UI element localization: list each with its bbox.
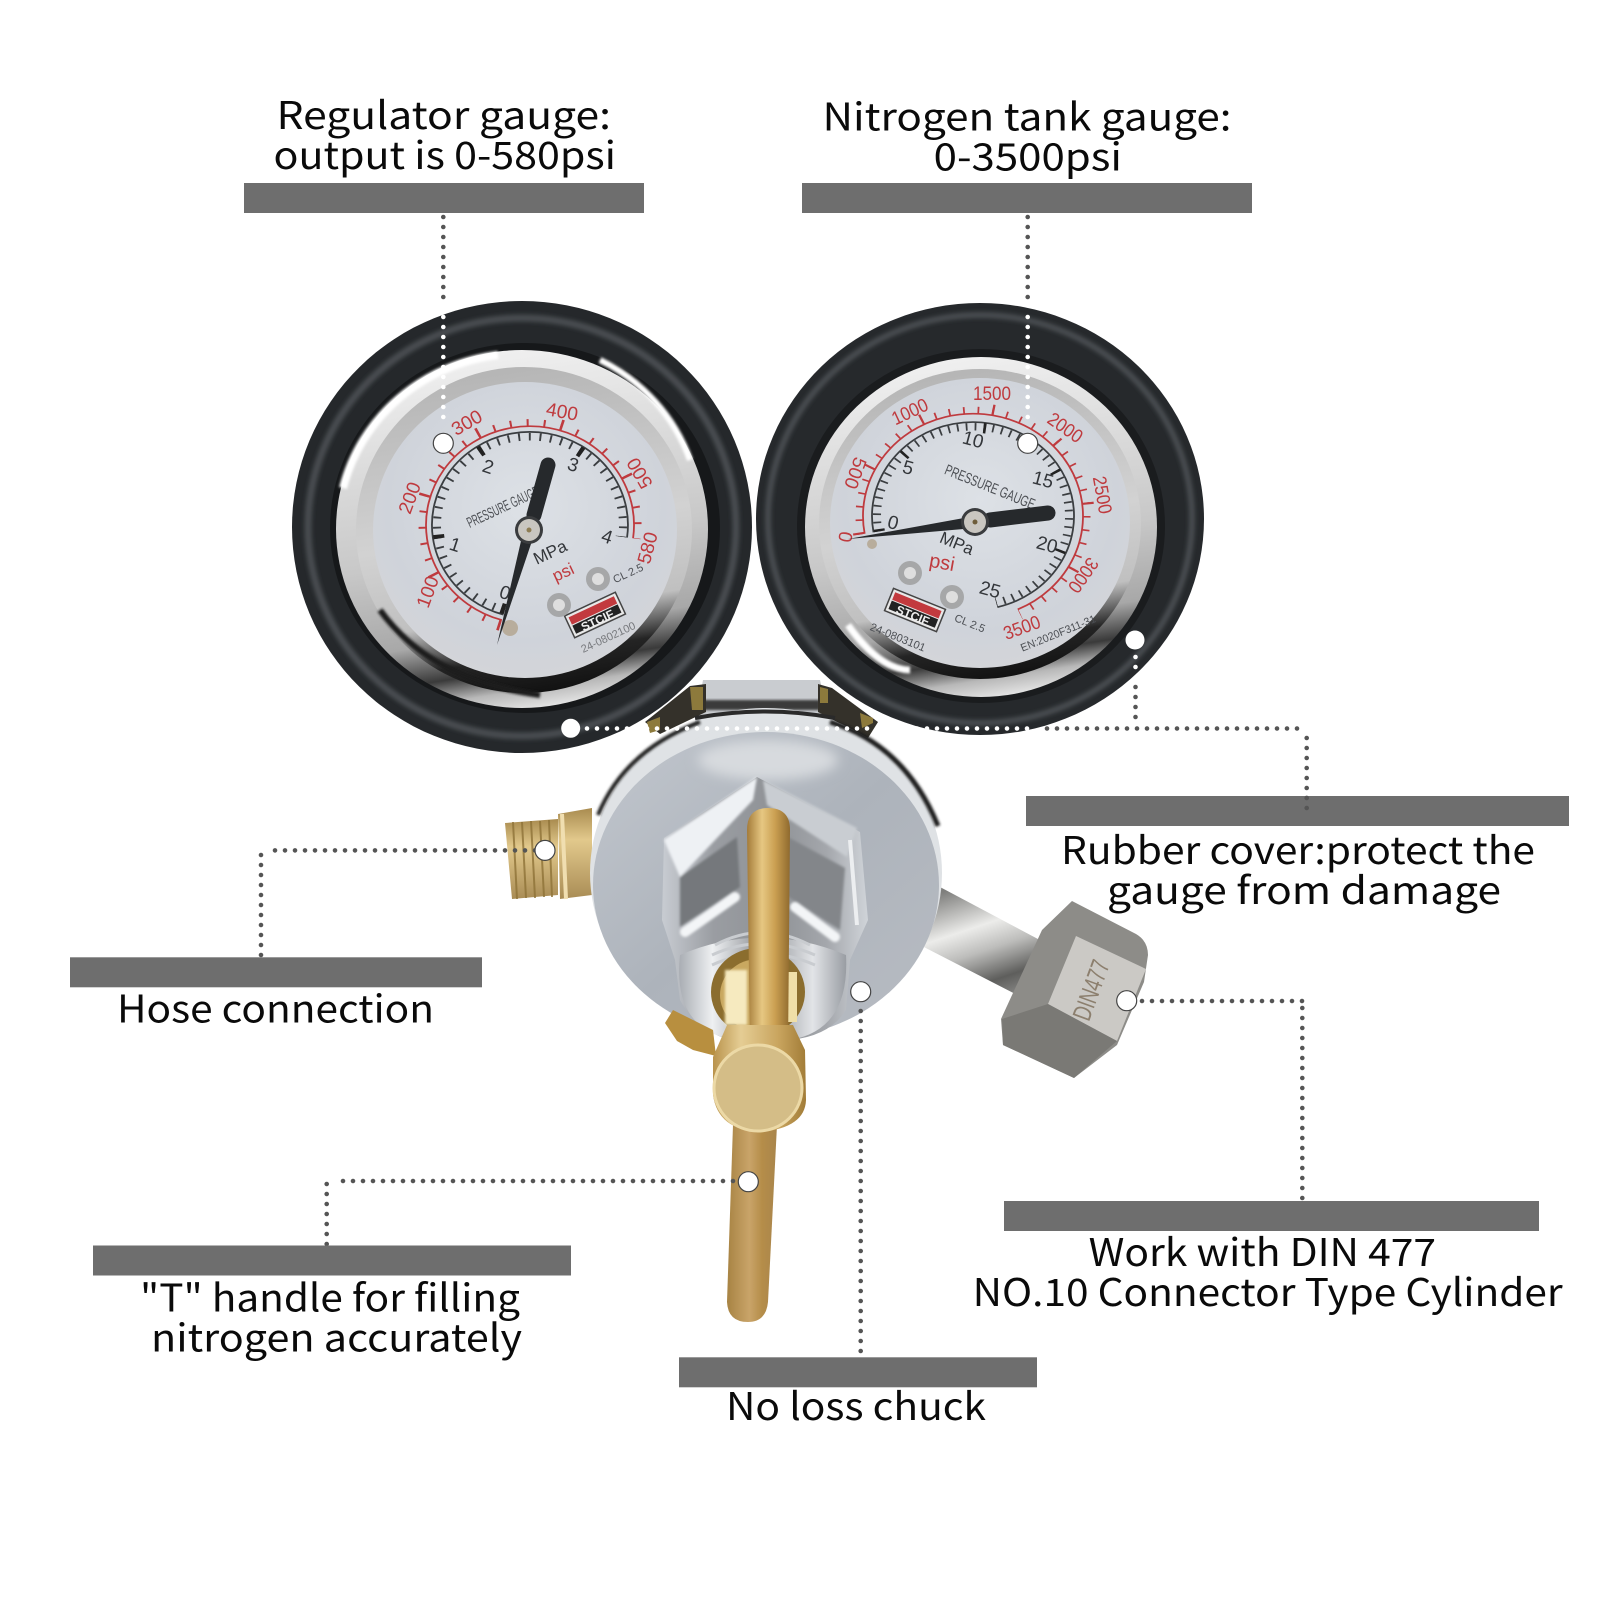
connector tube [918, 887, 1053, 1000]
marker: rubber cover left [561, 719, 580, 738]
dial markings left: psi [549, 559, 577, 586]
psi labels left: 500 [623, 454, 658, 492]
psi labels right: 1000 [889, 395, 932, 430]
brass side nut [665, 1010, 716, 1056]
brass bushing [711, 948, 805, 1036]
dial markings right: PRESSURE GAUGE [942, 462, 1038, 513]
MPa labels left: 2 [480, 456, 496, 479]
MPa labels right: 0 [885, 512, 901, 535]
MPa labels right: 20 [1034, 533, 1060, 558]
callout: nitrogen tank gauge: Nitrogen tank gauge: [822, 87, 1232, 142]
left regulator gauge [292, 301, 752, 753]
connector: regulator gauge [441, 217, 446, 427]
callout: T handle: nitrogen accurately [151, 1308, 522, 1363]
callout: no loss chuck: No loss chuck [726, 1376, 986, 1431]
dial markings right [868, 462, 1098, 654]
psi labels left [395, 399, 663, 611]
dial markings right: MPa [937, 528, 977, 559]
callout: regulator gauge: output is 0-580psi [274, 125, 616, 180]
dial markings right: 24-0803101 [868, 621, 927, 654]
callout: nitrogen tank gauge [802, 87, 1252, 213]
MPa labels right: 15 [1030, 468, 1056, 493]
psi labels right: 500 [839, 454, 870, 491]
callout: rubber cover [1026, 796, 1569, 915]
dial markings right: psi [927, 550, 957, 576]
callout: regulator gauge: Regulator gauge: [276, 85, 611, 140]
MPa labels left: 1 [447, 534, 463, 557]
dial markings left: PRESSURE GAUGE [464, 483, 542, 532]
chrome bezel left [336, 350, 708, 708]
upper rod [747, 808, 790, 1050]
dial markings right: CL 2.5 [953, 612, 987, 635]
logo badge right: STCIF [894, 603, 931, 629]
connector: nitrogen tank gauge [1025, 217, 1030, 427]
rubber cover left [292, 301, 752, 753]
right nitrogen tank gauge [756, 303, 1204, 735]
dial markings left: 24-0802100 [579, 620, 638, 656]
connector: hose connection [261, 850, 535, 961]
callout: T handle: "T" handle for filling [140, 1268, 520, 1323]
rubber cover right [756, 303, 1204, 735]
dial markings left: CL 2.5 [611, 562, 645, 586]
needle left [497, 465, 548, 645]
regulator body plate [590, 708, 942, 1038]
marker: hose connection [535, 840, 555, 860]
callout: DIN 477: NO.10 Connector Type Cylinder [973, 1262, 1563, 1317]
dial face left [373, 382, 677, 678]
hex nut [1001, 901, 1148, 1078]
logo badge right [884, 588, 945, 633]
callout: DIN 477 [973, 1201, 1563, 1317]
callout: DIN 477: Work with DIN 477 [1089, 1222, 1436, 1277]
callout: hose connection [70, 957, 482, 1034]
psi labels left: 200 [395, 480, 426, 517]
MPa labels right [885, 428, 1060, 603]
MPa labels left: 4 [599, 526, 616, 549]
MPa labels left: 0 [497, 582, 513, 605]
threads [712, 932, 815, 965]
psi labels right [835, 384, 1115, 645]
callout: no loss chuck [679, 1357, 1037, 1431]
connector: T handle [327, 1181, 733, 1246]
marker: nitrogen tank gauge [1018, 433, 1038, 453]
callout: rubber cover: gauge from damage [1107, 860, 1501, 915]
psi labels right: 0 [835, 530, 858, 544]
DIN477 engraving: DIN477 [1066, 956, 1116, 1024]
dial markings right: EN:2020F311-31 [1019, 613, 1098, 654]
psi labels left: 100 [413, 574, 444, 611]
screws right [867, 539, 964, 609]
regulator product illustration [292, 301, 1204, 1322]
dial face right [830, 378, 1130, 668]
psi labels right: 1500 [973, 384, 1011, 405]
psi labels left: 580 [634, 530, 663, 566]
dial markings left [464, 483, 645, 656]
dial markings left: MPa [530, 536, 571, 568]
connector: DIN 477 [1142, 1001, 1304, 1200]
callout: regulator gauge [244, 85, 644, 213]
connector: rubber cover [587, 657, 1307, 816]
dial scale left [394, 396, 665, 654]
MPa labels right: 10 [960, 428, 986, 453]
dial scale right [839, 391, 1107, 638]
psi labels left: 400 [544, 399, 579, 426]
psi labels right: 2500 [1088, 475, 1115, 516]
MPa labels right: 25 [977, 578, 1003, 603]
marker: DIN 477 [1117, 991, 1137, 1011]
marker: T handle [738, 1172, 758, 1192]
callout: nitrogen tank gauge: 0-3500psi [934, 127, 1122, 182]
MPa labels left [447, 454, 616, 605]
MPa labels right: 5 [900, 457, 916, 480]
MPa labels left: 3 [565, 454, 581, 477]
T handle [713, 808, 806, 1322]
chrome bezel right [805, 357, 1157, 697]
brass gauge stem [645, 680, 878, 738]
marker: no loss chuck [851, 982, 871, 1002]
psi labels right: 3000 [1063, 553, 1102, 596]
marker: regulator gauge [433, 433, 453, 453]
psi labels right: 3500 [1001, 612, 1044, 645]
screws left [502, 567, 610, 636]
hose connection fitting [505, 808, 592, 899]
logo badge left: STCIF [579, 607, 616, 634]
connector: no loss chuck [858, 1011, 863, 1356]
lower rod [727, 1125, 777, 1322]
psi labels left: 300 [448, 406, 486, 441]
callout: hose connection: Hose connection [117, 979, 434, 1034]
callout: T handle [93, 1246, 571, 1363]
handle hub [713, 1025, 806, 1132]
chrome hex bonnet [662, 777, 868, 1040]
DIN 477 cylinder connector [918, 887, 1148, 1078]
psi labels right: 2000 [1043, 409, 1086, 448]
needle right [848, 508, 1048, 539]
callout: rubber cover: Rubber cover:protect the [1061, 820, 1535, 875]
marker: rubber cover right [1126, 630, 1144, 650]
logo badge left [565, 592, 626, 639]
